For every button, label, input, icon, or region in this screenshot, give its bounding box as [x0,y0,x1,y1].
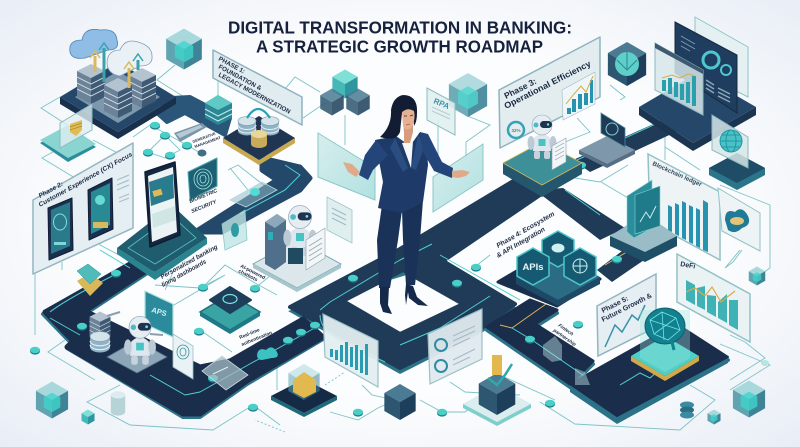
jacket [375,132,428,213]
label: management [192,132,222,149]
lapels [390,135,425,172]
label: phase 2 text: Phase 2: [38,181,64,200]
chart: DeFi bars [686,280,738,330]
legs [377,200,423,288]
glass tile bottom road [202,356,248,390]
dashboard platform [639,17,756,151]
panel: back glass [695,17,748,97]
faint node [761,360,769,366]
panel: paper sheet [327,197,352,243]
left bottom cubes [30,347,555,424]
panel: blockchain ledger [648,154,720,260]
icon: brain [645,308,685,350]
icon: cube cluster [320,70,370,116]
AI chatbot slab [194,284,260,336]
label: fintech partnership: partnership [551,327,577,348]
label: phase 5 text: Phase 5: [601,295,630,315]
icon: upload arrows [90,43,143,88]
left robot station [90,291,193,379]
panel: RPA [427,73,487,135]
neck [403,120,413,143]
arrow: sync arc [247,109,270,118]
road: central ring and approaches [290,180,540,368]
label: phase 2 text: Customer Experience (CX) Focus [38,151,134,209]
label: biometric security: SECURITY [191,199,218,215]
title [228,18,572,56]
glass skyline [543,336,590,385]
chatbot robot platform [253,205,341,292]
right bottom cubes [680,266,765,424]
panel: status donuts [428,309,482,384]
label: blockchain ledger: Blockchain ledger [651,160,703,189]
phone platform [117,162,207,280]
chart: bars [330,342,368,375]
icon: globe [720,130,742,152]
label: phase 4: & API Integration [496,226,547,260]
icon: shield cube [608,42,646,86]
hub platform with cards [610,180,677,262]
icon: small stack [680,402,694,418]
chart: donut: 32% [511,128,521,133]
label: biometric security: BIOMETRIC [189,188,218,205]
arm: left [359,140,388,180]
woman executive [343,95,470,314]
connector lines [35,65,770,432]
icon: fingerprint tile [173,334,193,379]
label: AI-powered chatbots: chatbots [237,268,259,283]
glass tile on road [230,182,277,207]
panel: dark dashboard [675,22,737,113]
road: lower-right connector [487,300,593,384]
icon: robot [124,316,156,365]
road network [43,97,728,419]
icon: server stack [90,312,110,352]
icon: teal cards [627,180,660,238]
chart: ledger bars [668,200,708,252]
node [471,264,481,272]
yellow crate on road [77,264,103,296]
hub tile [579,113,635,168]
icon: cylinder [111,391,125,416]
chart: efficiency bars [562,72,595,120]
panel: left hand screen [318,133,375,200]
icon: biometric tile [188,158,217,200]
label: biometric security [189,188,218,215]
panel: RPA: RPA [432,97,451,111]
panel: right hand screen [433,144,483,212]
robot platform [503,115,582,197]
label: management: MANAGEMENT [194,135,222,149]
arm: right [420,132,453,178]
small glass tile [222,210,247,250]
label: management: GENERATIVE [192,132,217,144]
small teal slab with glass card [40,104,96,162]
label: phase 4: Phase 4: Ecosystem [496,211,556,250]
hair [380,95,417,139]
API platform [498,231,600,306]
icon: document [306,228,325,270]
icon: main phone [145,162,180,247]
label: phase 3 text: Phase 3: [502,76,538,101]
icon: server cabinet [265,214,286,270]
icon: navy cube [384,384,416,420]
API platform: APIs [522,262,544,273]
panel: phase 1 [213,50,302,125]
node [573,321,583,329]
icon: teal stack [205,95,232,125]
AI brain on pedestal [631,308,699,381]
shoes [380,284,428,314]
title: A STRATEGIC GROWTH ROADMAP [256,36,543,56]
panel: phase 5 [597,274,656,356]
label: AI-powered chatbots: AI-powered [239,263,266,281]
cloud servers platform [60,29,176,139]
icon: yellow card [70,120,82,136]
icon: phone right [88,178,113,240]
label: fintech partnership: Fintech [557,323,574,337]
label: phase 1 text: FOUNDATION & [217,64,263,92]
panel: phase 2 [33,143,134,274]
globe panel on slab [709,115,765,190]
label: real-time authentication: authentication [241,330,273,348]
title: DIGITAL TRANSFORMATION IN BANKING: [228,18,572,38]
label: phase 1 text: PHASE 1: [217,56,246,75]
icon: server stacks [77,64,156,118]
icon: robot [283,205,317,256]
device: management module [143,122,207,160]
road: upper links [157,97,230,135]
panel: DeFi: DeFi [680,261,696,271]
icon: robot with checklist [528,115,566,170]
small teal cloud on road [257,347,278,360]
chart: growth line [605,305,645,347]
icon: gold bar and arrow [488,355,512,385]
label: personalized banking: lining dashboards [161,258,208,289]
icon: database cylinders [238,116,279,148]
label: phase 1 text: LEGACY MODERNIZATION [217,72,292,116]
panel: front glass chart [655,43,703,115]
panel: phase 3 [499,37,600,148]
route lines on road [50,122,660,395]
face [402,109,415,130]
label: real-time authentication: Real-time [239,327,261,341]
bottom right platform [570,324,728,424]
database platform [223,109,295,165]
panel: partner cloud [718,188,760,251]
growth cube platform [463,355,531,426]
icon: API hexagons [517,231,596,285]
gold cube on dark platform [271,364,337,417]
label: phase 3 text: Operational Efficiency [502,58,593,111]
icon: phone left [48,198,73,260]
centre bottom chart panel [323,314,378,387]
shirt [402,141,413,168]
icon: APS tile: APS [150,305,168,318]
icon: top cube [166,28,202,70]
label: personalized banking: Personalized banking [160,244,219,281]
hands [343,162,470,178]
road shadow edges [43,262,728,419]
icon: clouds [70,29,152,76]
list lines [117,175,129,202]
route nodes [111,270,121,278]
label: phase 5 text: Future Growth & [601,292,653,324]
road: bottom-left route [45,260,323,414]
panel: DeFi [677,254,750,342]
